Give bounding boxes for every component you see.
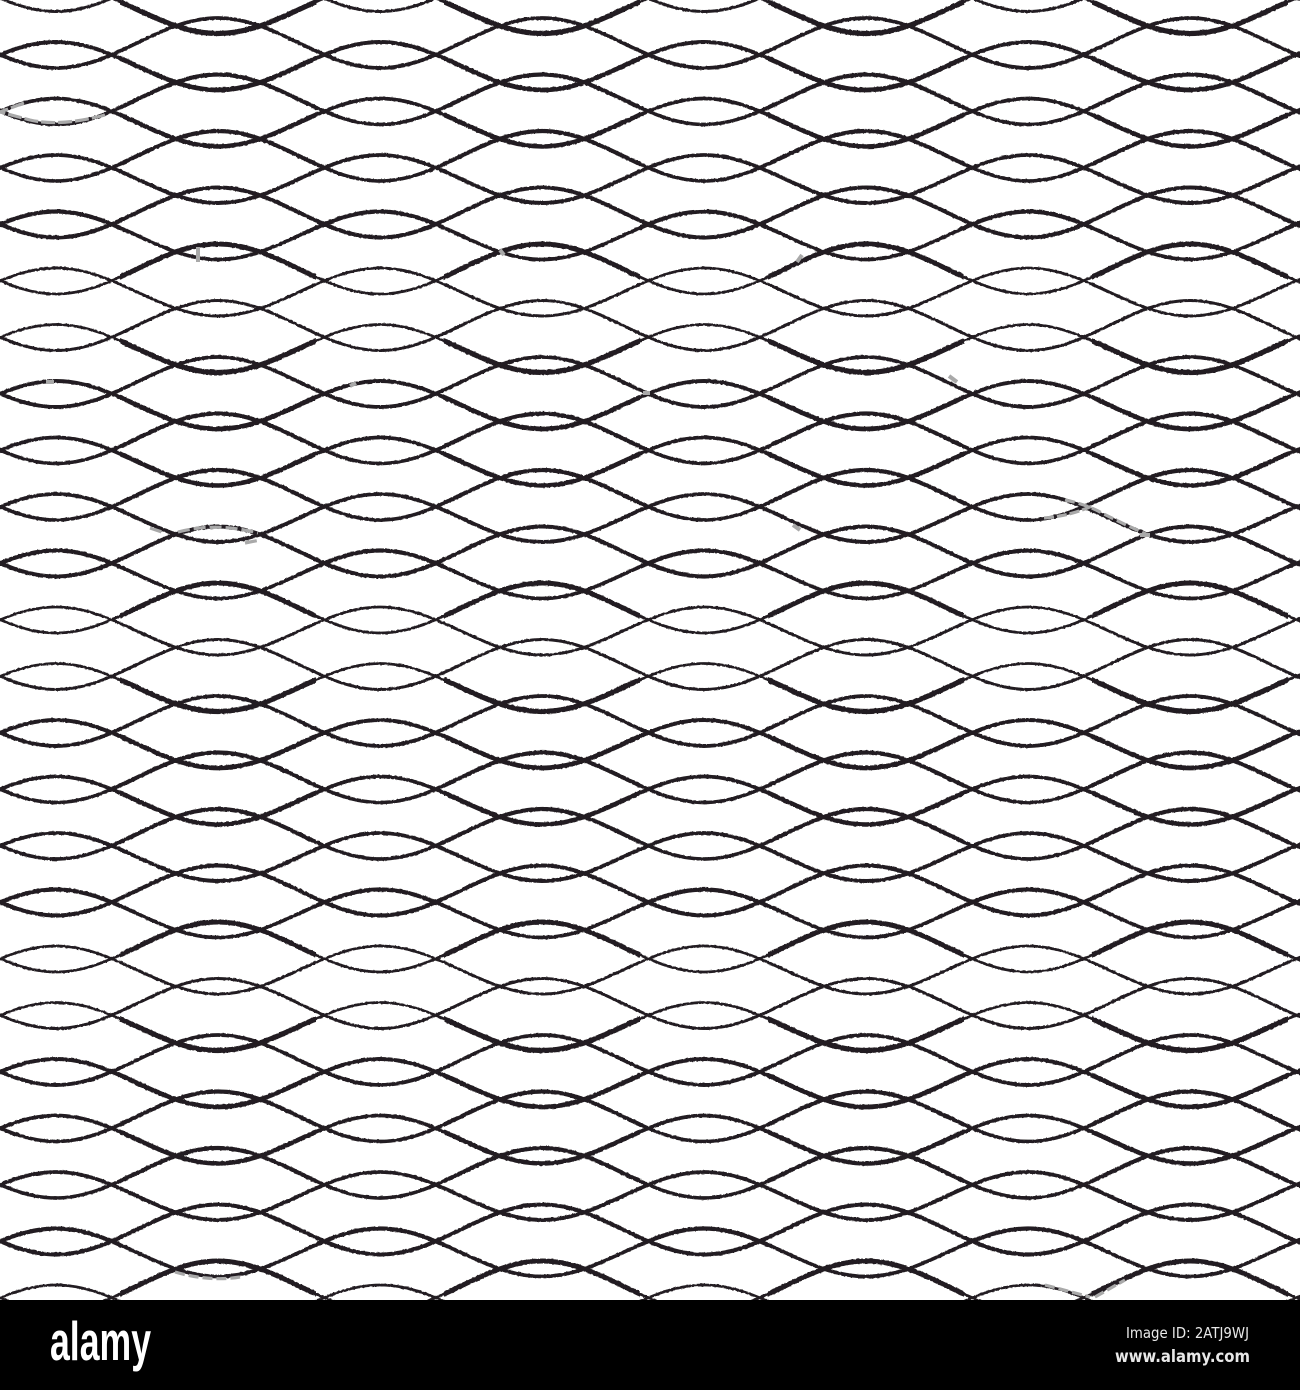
logo: alamy: alamy xyxy=(50,1310,151,1372)
image id: Image ID: 2ATJ9WJ xyxy=(1126,1324,1249,1342)
gray watermark patches on the lines xyxy=(0,103,1150,1297)
footer band xyxy=(0,1300,1300,1390)
website: www.alamy.com xyxy=(1115,1347,1250,1367)
